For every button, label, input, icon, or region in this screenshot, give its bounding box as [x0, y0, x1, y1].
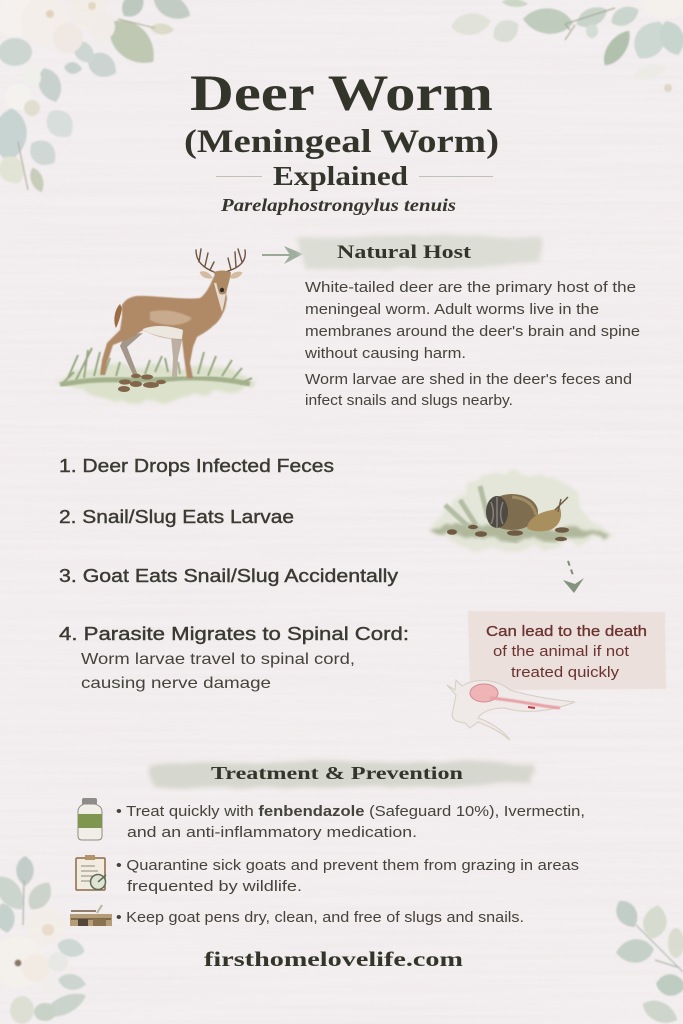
text: bullet 1: • Treat quickly with fenbendazole (Safeguard 10%), Ivermectin, [116, 803, 585, 820]
life cycle steps: causing nerve damage [81, 675, 271, 692]
deer head [214, 270, 231, 294]
callout: warning: treated quickly [511, 664, 620, 681]
far legs [120, 333, 143, 375]
slug [527, 508, 561, 531]
illustration: goat head with spinal cord [447, 680, 575, 740]
life cycle steps: 2. Snail/Slug Eats Larvae [59, 506, 294, 527]
title: Parelaphostrongylus tenuis [220, 195, 456, 215]
heading: treatment and prevention [148, 762, 534, 788]
title [184, 66, 499, 215]
icon: goat pen [70, 905, 112, 926]
text block: natural host description: meningeal worm. Adult worms live in the [305, 301, 599, 318]
heading: natural host [296, 236, 542, 269]
grass patch [56, 348, 258, 403]
text: bullet 3: • Keep goat pens dry, clean, and free of slugs and snails. [116, 909, 524, 926]
text: bullet 2: frequented by wildlife. [127, 878, 302, 895]
icon: medicine bottle [78, 798, 102, 840]
life cycle steps: Worm larvae travel to spinal cord, [81, 651, 355, 668]
text block: natural host description: membranes around the deer's brain and spine [305, 323, 640, 340]
text block: natural host description [304, 279, 640, 409]
footer website: firsthomelovelife.com [204, 947, 464, 971]
title: Deer Worm [190, 66, 493, 122]
floral corner: top right [450, 0, 683, 92]
illustration: snail and slug [428, 473, 612, 550]
text: bullet 1: and an anti-inflammatory medication. [127, 824, 417, 841]
text block: natural host description: White-tailed deer are the primary host of the [305, 279, 636, 296]
title: Explained [273, 161, 408, 191]
illustration: deer on grass with droppings [56, 249, 258, 403]
text: bullet 2 [116, 857, 579, 895]
arrow to natural host [262, 246, 303, 264]
dashed arrow down [563, 561, 584, 593]
antlers [196, 249, 245, 272]
floral corner: bottom left [0, 856, 90, 1024]
heading: treatment and prevention: Treatment & Prevention [211, 763, 463, 783]
text block: natural host description: without causing harm. [304, 345, 466, 362]
icon: clipboard [76, 855, 106, 890]
callout: warning: of the animal if not [493, 643, 630, 660]
life cycle steps: 4. Parasite Migrates to Spinal Cord: [59, 623, 409, 644]
heading: natural host: Natural Host [337, 242, 472, 263]
life cycle steps: 3. Goat Eats Snail/Slug Accidentally [59, 565, 399, 586]
droppings [118, 374, 166, 392]
text: bullet 2: • Quarantine sick goats and prevent them from grazing in areas [116, 857, 579, 874]
snail shell [486, 494, 538, 530]
floral corner: top left [0, 0, 195, 194]
deer body [100, 276, 229, 378]
floral corner: bottom right [611, 896, 683, 1024]
text block: natural host description: infect snails and slugs nearby. [305, 392, 513, 409]
deer tail [114, 304, 122, 328]
life cycle steps: 1. Deer Drops Infected Feces [59, 455, 334, 476]
text: bullet 1 [116, 803, 585, 841]
callout: warning [468, 611, 666, 690]
life cycle steps [59, 455, 409, 692]
title: (Meningeal Worm) [184, 124, 499, 160]
callout: warning: Can lead to the death [486, 623, 647, 640]
text block: natural host description: Worm larvae are shed in the deer's feces and [305, 371, 632, 388]
